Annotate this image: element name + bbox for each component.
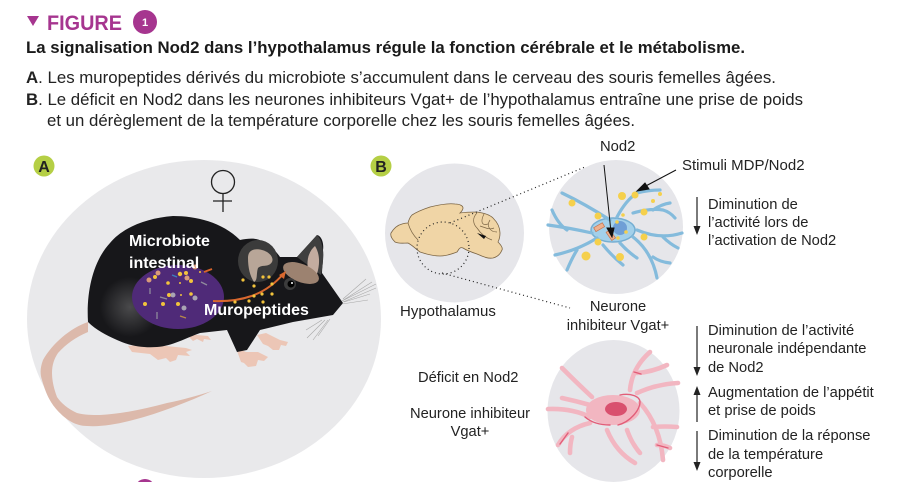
figure heading: FIGURE	[47, 11, 122, 35]
badge B	[370, 156, 392, 176]
icon: female symbol	[212, 170, 234, 212]
effect arrow and text 4: de la température	[708, 447, 823, 463]
figure heading: 1	[142, 17, 148, 29]
yellow muropeptides	[568, 192, 662, 261]
pink neuron circle	[548, 340, 680, 482]
badge A	[34, 156, 54, 176]
effect arrow and text 4	[694, 428, 870, 481]
label: neurone inhibiteur	[567, 299, 669, 334]
label: muropeptides: Muropeptides	[204, 302, 309, 319]
effect arrow and text 4: Diminution de la réponse	[708, 428, 870, 444]
effect arrow and text 3: et prise de poids	[708, 403, 816, 419]
labels: deficit	[410, 370, 530, 440]
icon: blue neuron	[548, 190, 682, 278]
label: microbiote intestinal: Microbiote	[129, 233, 210, 250]
ear	[238, 240, 278, 282]
head patch	[280, 258, 322, 288]
neuron circle	[549, 160, 683, 294]
hip highlight	[100, 277, 160, 337]
label: Hypothalamus: Hypothalamus	[400, 303, 496, 320]
figure heading	[27, 10, 157, 35]
badge A: A	[38, 159, 50, 176]
effect arrow and text 1: l’activation de Nod2	[708, 233, 836, 249]
effect arrow and text 2: de Nod2	[708, 360, 764, 376]
effect arrow and text 3: Augmentation de l’appétit	[708, 385, 874, 401]
effect arrow and text 3	[694, 385, 874, 422]
effect arrow and text 1: l’activité lors de	[708, 215, 808, 231]
icon: brain	[391, 204, 502, 258]
hypothalamus dotted outlines	[417, 167, 585, 308]
partial magenta badge at bottom	[135, 479, 155, 482]
panel B: brain	[370, 139, 836, 334]
Nod2 receptors	[594, 223, 616, 241]
title: La signalisation Nod2 dans l’hypothalamus régule la fonction cérébrale et le métabolisme.	[26, 38, 745, 57]
effect arrow and text 1: Diminution de	[708, 197, 798, 213]
muropeptide arrow	[213, 271, 286, 304]
description text: et un dérèglement de la température corporelle chez les souris femelles âgées.	[47, 111, 635, 130]
effect arrow and text 2: Diminution de l’activité	[708, 323, 854, 339]
label: microbiote intestinal	[129, 233, 210, 272]
label: stimuli: Stimuli MDP/Nod2	[682, 157, 805, 174]
badge B: B	[375, 159, 387, 176]
effect arrow and text 2: neuronale indépendante	[708, 341, 866, 357]
mouse body	[88, 216, 343, 352]
tail	[41, 322, 212, 426]
panel A background circle	[27, 160, 381, 478]
icon: pink neuron	[548, 352, 678, 463]
description text: A. Les muropeptides dérivés du microbiote s’accumulent dans le cerveau des souris femelles âgées.	[26, 68, 776, 87]
label: Nod2: Nod2	[600, 139, 635, 155]
gut microbiota region	[132, 264, 224, 329]
whiskers	[306, 279, 376, 340]
labels: deficit: Déficit en Nod2	[418, 370, 518, 386]
label: neurone inhibiteur: Neurone	[590, 299, 646, 315]
description text	[26, 68, 803, 130]
effect arrow and text 4: corporelle	[708, 465, 772, 481]
effect arrow and text 2	[694, 323, 866, 376]
panel B: deficiency	[410, 323, 874, 482]
labels: deficit: Neurone inhibiteur	[410, 406, 530, 422]
description text: B. Le déficit en Nod2 dans les neurones inhibiteurs Vgat+ de l’hypothalamus entraîne une prise de poids	[26, 90, 803, 109]
label: neurone inhibiteur: inhibiteur Vgat+	[567, 318, 669, 334]
hind and front paws	[128, 333, 288, 367]
label: microbiote intestinal: intestinal	[129, 255, 199, 272]
eye	[284, 278, 296, 290]
labels: deficit: Vgat+	[451, 424, 489, 440]
brain circle	[385, 164, 524, 302]
panel A: mouse	[27, 156, 381, 478]
arrows: Nod2 and stimuli	[604, 165, 676, 237]
effect arrow and text 1	[694, 197, 836, 249]
far ear	[297, 235, 323, 275]
